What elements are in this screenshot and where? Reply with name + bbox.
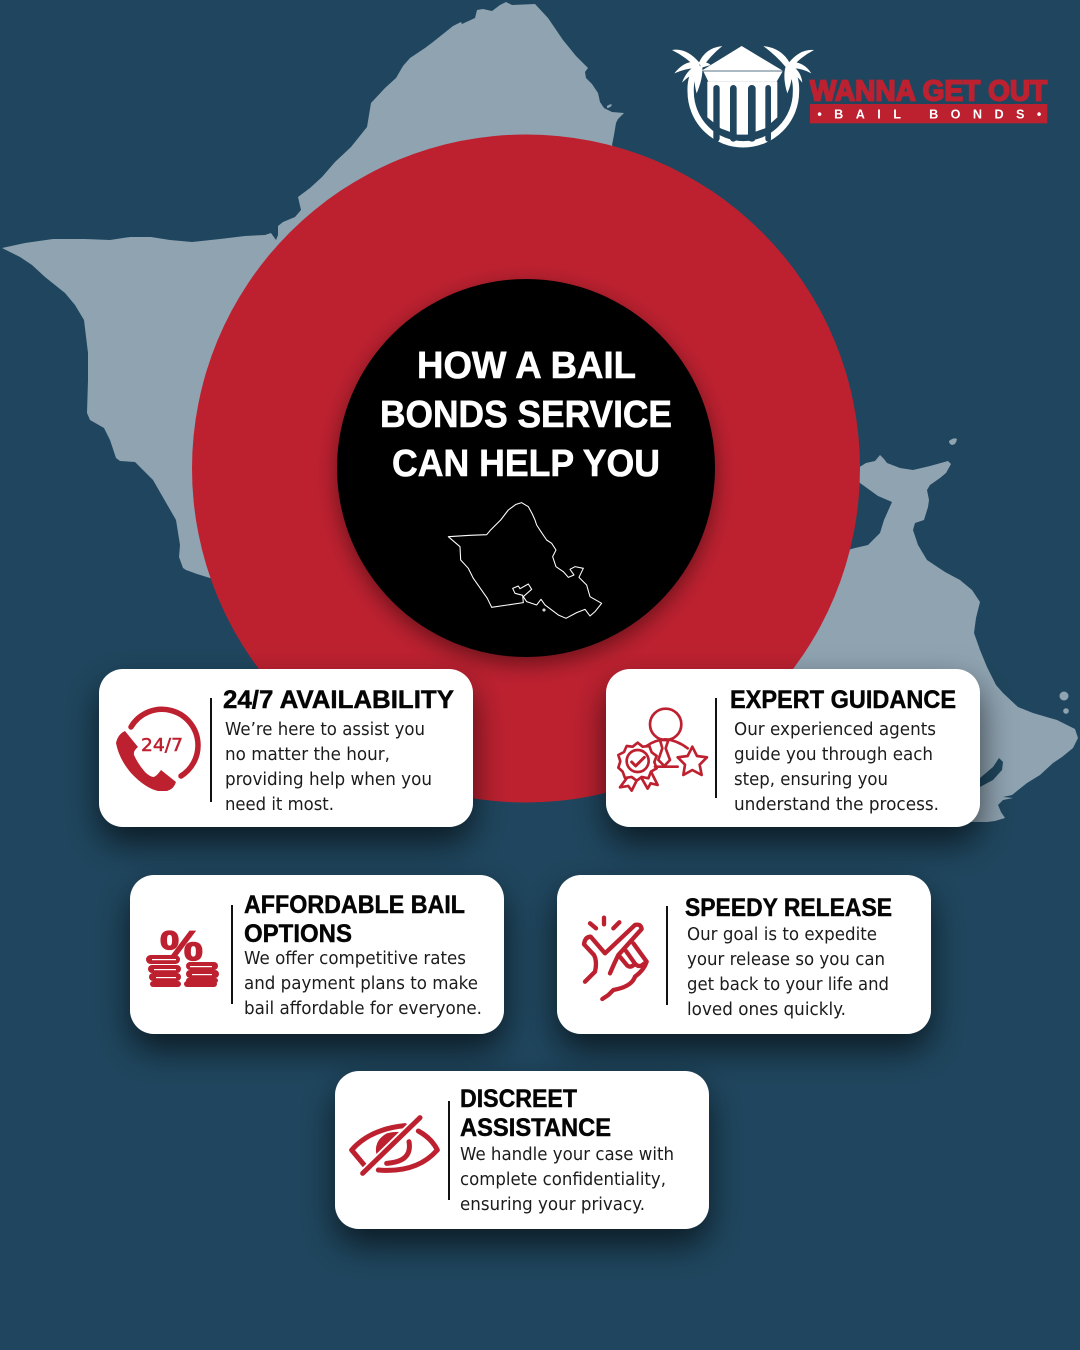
- body text: We handle your case with: [460, 1144, 674, 1165]
- heading: [244, 891, 465, 948]
- body text: Our experienced agents: [734, 719, 936, 740]
- heading: DISCREET: [460, 1085, 577, 1113]
- icon: Oahu outline: [448, 503, 602, 618]
- body text: no matter the hour,: [225, 744, 390, 765]
- body text: and payment plans to make: [244, 973, 478, 994]
- body text: bail affordable for everyone.: [244, 998, 482, 1019]
- body text: [687, 924, 889, 1020]
- black circle panel: [337, 279, 715, 657]
- icon: percent and coins: [146, 922, 219, 987]
- body text: ensuring your privacy.: [460, 1194, 645, 1215]
- body text: understand the process.: [734, 794, 939, 815]
- title: [380, 345, 672, 485]
- body text: need it most.: [225, 794, 334, 815]
- heading: SPEEDY RELEASE: [685, 894, 892, 922]
- title: HOW A BAIL: [417, 345, 636, 387]
- map: Oahu island silhouette: [2, 2, 1078, 822]
- title: BONDS SERVICE: [380, 394, 672, 436]
- icon: agent with rosette and star: [618, 709, 707, 791]
- heading: ASSISTANCE: [460, 1114, 611, 1142]
- card: expert guidance: [606, 669, 980, 827]
- icon: percent and coins: %: [160, 922, 203, 969]
- red bar: Bail Bonds: [810, 104, 1047, 123]
- body text: [244, 948, 482, 1019]
- card: discreet assistance: [335, 1071, 709, 1229]
- heading: EXPERT GUIDANCE: [730, 686, 956, 714]
- icon: snapping fingers: [584, 918, 647, 999]
- card: 24/7 availability: [99, 669, 473, 827]
- body text: [225, 719, 432, 815]
- logo: [672, 46, 1048, 144]
- wordmark: WANNA GET OUT: [810, 76, 1048, 108]
- body text: We’re here to assist you: [225, 719, 425, 740]
- body text: [460, 1144, 674, 1215]
- body text: guide you through each: [734, 744, 933, 765]
- heading: [460, 1085, 611, 1142]
- card: affordable bail options: [130, 875, 504, 1034]
- icon: crossed-out eye: [352, 1118, 437, 1173]
- body text: step, ensuring you: [734, 769, 888, 790]
- heading: AFFORDABLE BAIL: [244, 891, 465, 919]
- red bar: Bail Bonds: •BAIL BONDS•: [817, 107, 1042, 121]
- body text: Our goal is to expedite: [687, 924, 877, 945]
- title: CAN HELP YOU: [392, 443, 660, 485]
- red circle: [192, 134, 860, 802]
- body text: get back to your life and: [687, 974, 889, 995]
- heading: 24/7 AVAILABILITY: [223, 686, 454, 714]
- body text: providing help when you: [225, 769, 432, 790]
- heading: OPTIONS: [244, 920, 352, 948]
- card: speedy release: [557, 875, 931, 1034]
- body text: complete confidentiality,: [460, 1169, 666, 1190]
- icon: courthouse in ring with palms: [672, 46, 814, 144]
- body text: We offer competitive rates: [244, 948, 466, 969]
- body text: your release so you can: [687, 949, 885, 970]
- icon: phone 24/7: [116, 709, 198, 791]
- body text: loved ones quickly.: [687, 999, 846, 1020]
- body text: [734, 719, 939, 815]
- icon: phone 24/7: 24/7: [141, 735, 183, 756]
